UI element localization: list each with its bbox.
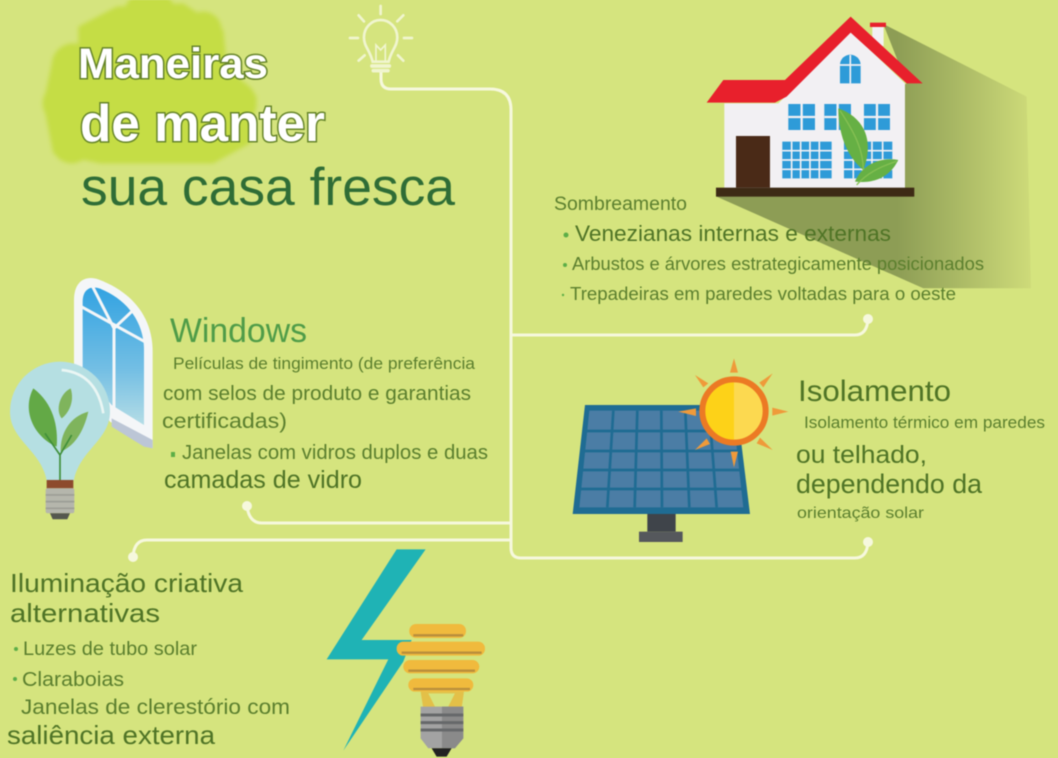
house base: [716, 188, 914, 197]
title: sua casa fresca: [81, 158, 456, 217]
red roof: [707, 17, 923, 103]
title: de manter: [80, 95, 325, 153]
lower windows: [782, 142, 892, 178]
panel: Windows: Janelas com vidros duplos e duas: [182, 442, 488, 464]
connector lines: [130, 72, 872, 560]
panel: Sombreamento: Trepadeiras em paredes voltadas para o oeste: [570, 284, 956, 304]
door: [736, 136, 770, 188]
bulb spirals: [421, 692, 464, 708]
icon: house with long shadow: [707, 17, 1031, 288]
panel: Sombreamento: Venezianas internas e externas: [575, 221, 891, 246]
background blob behind title: [43, 0, 257, 163]
icon: plant in bulb: [10, 362, 110, 519]
bulb base: [47, 480, 73, 488]
title: Maneiras: [78, 40, 268, 88]
house shadow: [717, 24, 1031, 288]
panel: Windows: Windows: [170, 312, 307, 350]
panel: Sombreamento: [554, 194, 984, 304]
panel: Isolamento: Isolamento: [798, 375, 951, 408]
panel: Iluminação criativa: [7, 568, 290, 750]
house wall: [724, 32, 905, 188]
title: [78, 40, 456, 217]
panel: Isolamento: Isolamento térmico em paredes: [804, 413, 1045, 432]
panel: Isolamento: ou telhado,: [796, 441, 927, 469]
panel: Iluminação criativa: alternativas: [10, 598, 160, 628]
icon: arched window: [74, 278, 153, 448]
panel: Sombreamento: Sombreamento: [554, 194, 687, 215]
panel: Iluminação criativa: saliência externa: [7, 720, 216, 750]
icon: lightning bolt and compact bulb: [327, 549, 485, 757]
panel: Windows: camadas de vidro: [164, 466, 362, 494]
panel: Iluminação criativa: Luzes de tubo solar: [23, 638, 198, 660]
icon: solar panel and sun: [573, 358, 788, 542]
panel: Windows: com selos de produto e garantias: [163, 382, 471, 405]
leaves: [838, 108, 868, 170]
panel: Iluminação criativa: Claraboias: [22, 668, 124, 691]
panel: Iluminação criativa: Janelas de clerestório com: [21, 695, 290, 719]
panel: Windows: Películas de tingimento (de preferência: [173, 355, 476, 373]
panel: Iluminação criativa: Iluminação criativa: [10, 568, 244, 598]
panel: Sombreamento: Arbustos e árvores estrategicamente posicionados: [572, 254, 984, 274]
arched window: [840, 55, 861, 83]
upper windows: [788, 104, 890, 130]
bulb screw base: [421, 707, 463, 748]
icon: light bulb outline: [350, 6, 412, 71]
panel: Windows: [162, 312, 488, 494]
panel: Isolamento: orientação solar: [797, 505, 925, 522]
sun: [702, 379, 766, 443]
panel: Windows: certificadas): [162, 410, 287, 433]
panel: Isolamento: [796, 375, 1045, 522]
panel: Isolamento: dependendo da: [796, 469, 983, 499]
